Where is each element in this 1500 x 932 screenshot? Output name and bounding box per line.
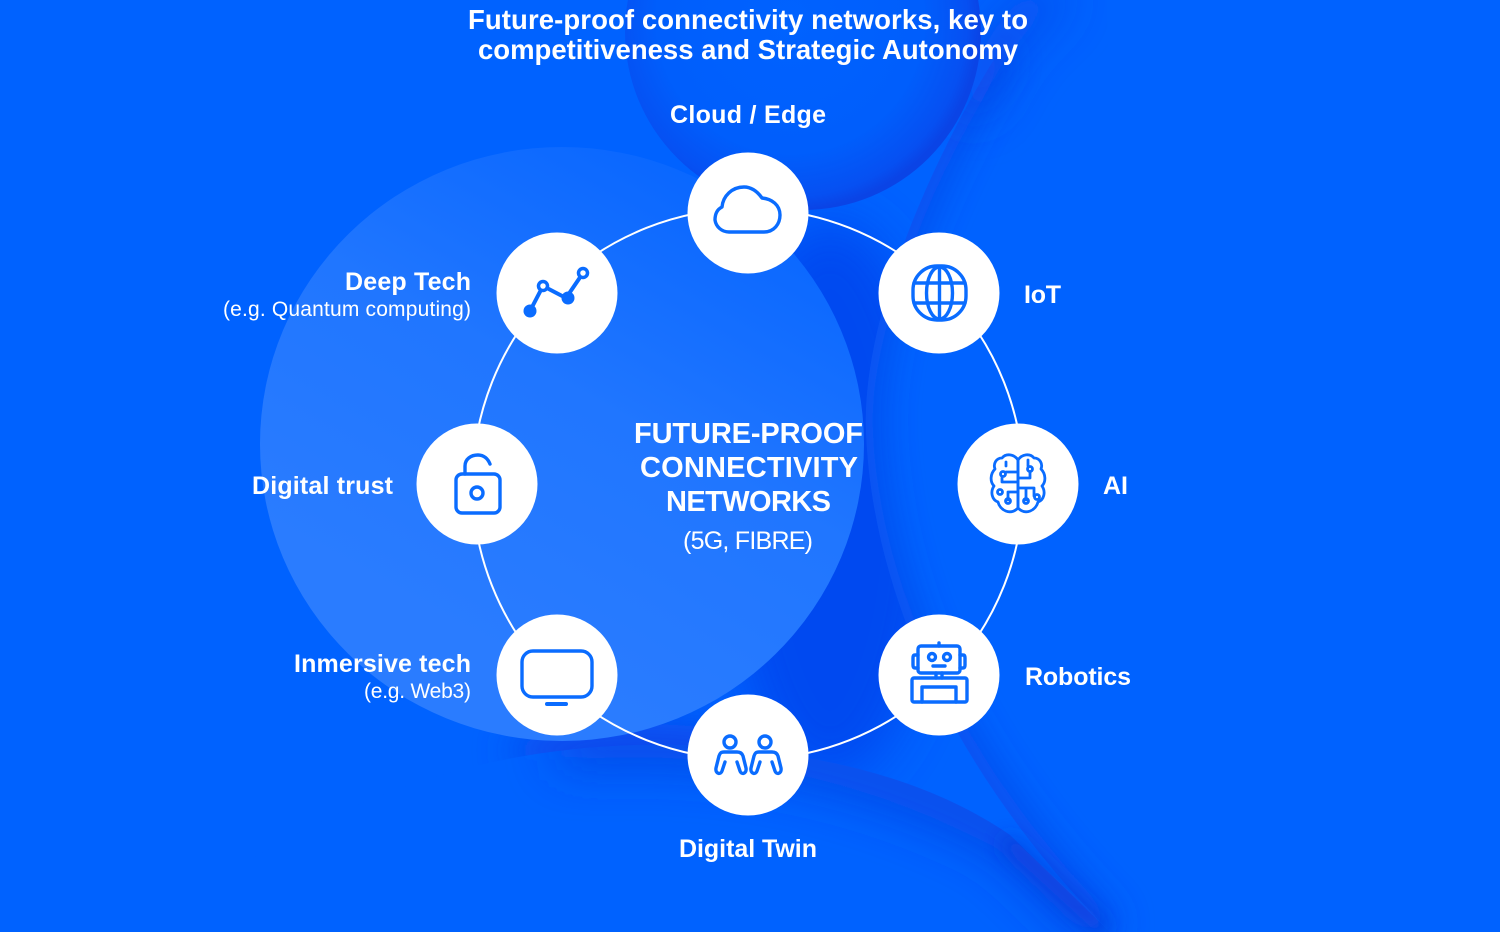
label: Cloud / Edge: Cloud / Edge: [670, 101, 826, 129]
label: IoT: IoT: [1024, 281, 1061, 309]
node: Immersive tech: [496, 614, 618, 736]
infographic canvas: [224, 0, 1130, 932]
centre label: (5G, FIBRE): [683, 527, 813, 555]
icon: brain circuit: [991, 455, 1045, 512]
connecting ring: [472, 208, 1024, 760]
node: IoT: [878, 232, 1000, 354]
label: AI: AI: [1103, 472, 1128, 500]
label: Deep Tech: (e.g. Quantum computing): [223, 298, 471, 321]
background shapes: [260, 0, 1121, 932]
node: Robotics: [878, 614, 1000, 736]
icon: line chart: [524, 268, 588, 318]
icon: cloud: [715, 187, 780, 232]
centre label: [634, 418, 863, 555]
centre label: NETWORKS: [666, 486, 831, 518]
label: Inmersive tech: Inmersive tech: [294, 650, 471, 678]
icon: robot: [912, 643, 967, 702]
label: Robotics: Robotics: [1025, 663, 1131, 691]
title: [468, 4, 1028, 65]
label: Digital trust: Digital trust: [252, 472, 394, 500]
label: Deep Tech: Deep Tech: [345, 268, 471, 296]
title: competitiveness and Strategic Autonomy: [478, 34, 1019, 65]
label: Digital Twin: Digital Twin: [679, 835, 817, 863]
icon: open padlock: [456, 455, 500, 513]
node: Digital trust: [416, 424, 538, 544]
node: AI: [958, 424, 1078, 544]
icon: monitor: [522, 651, 592, 704]
label: Inmersive tech: (e.g. Web3): [364, 680, 471, 703]
icon: globe: [913, 266, 966, 320]
centre label: FUTURE-PROOF: [634, 418, 863, 450]
centre label: CONNECTIVITY: [640, 452, 858, 484]
node: Digital Twin: [688, 694, 808, 816]
label: Inmersive tech: [294, 650, 471, 703]
node: Cloud / Edge: [688, 152, 808, 274]
label: Deep Tech: [223, 268, 471, 321]
node: Deep Tech: [496, 232, 618, 354]
icon: two people: [716, 736, 781, 773]
title: Future-proof connectivity networks, key to: [468, 4, 1028, 35]
